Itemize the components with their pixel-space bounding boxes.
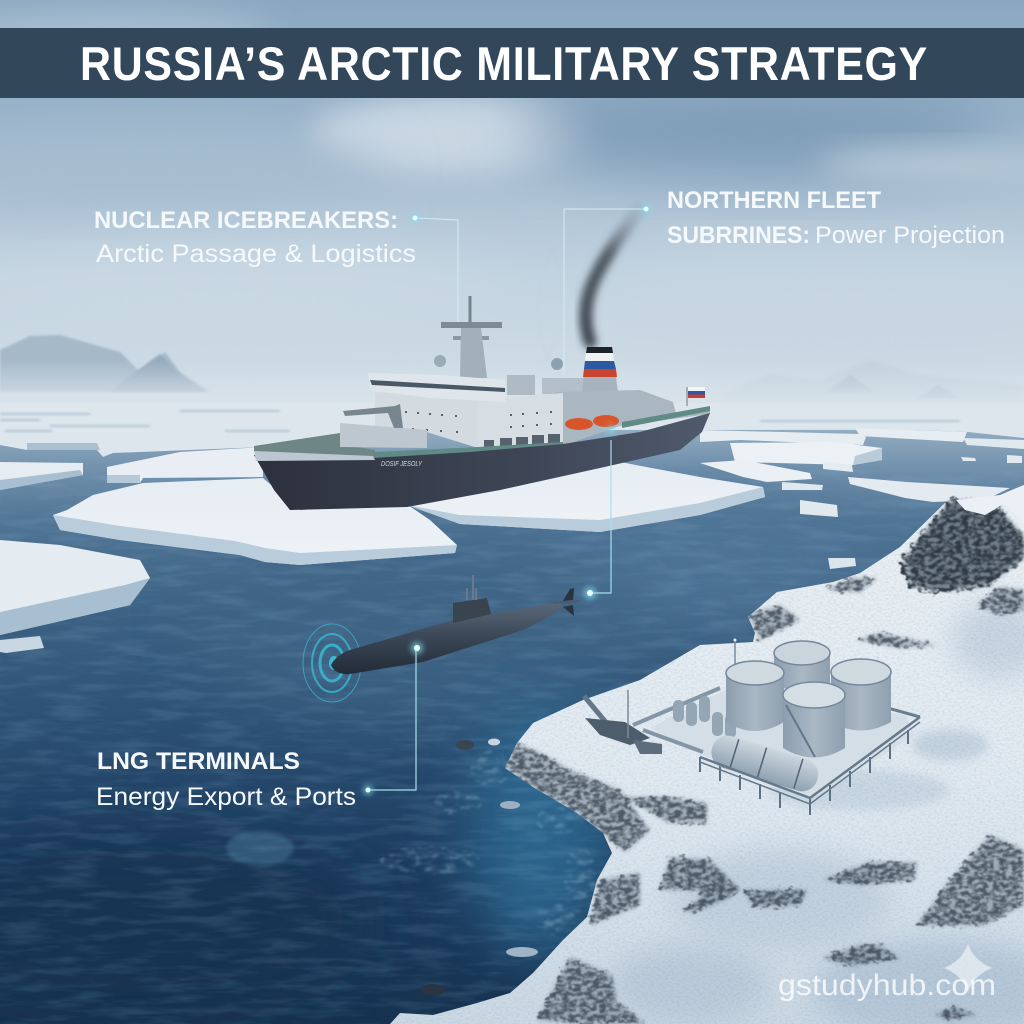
periscopes xyxy=(467,575,476,600)
left distant floes xyxy=(0,447,263,490)
foredeck crane block xyxy=(340,404,427,448)
label: LNG terminals: LNG TERMINALS xyxy=(97,748,300,775)
bow strip xyxy=(254,451,375,461)
right distant floes xyxy=(700,428,1024,569)
main ice floe, left of ship xyxy=(53,478,457,565)
front rack rails xyxy=(700,717,920,804)
coastal foam xyxy=(380,750,596,936)
horizontal tank xyxy=(707,732,822,795)
bridge deck xyxy=(368,373,505,402)
pipe racks xyxy=(633,688,920,815)
callout line: LNG terminals xyxy=(363,642,423,795)
label: nuclear icebreakers xyxy=(94,207,416,268)
horizon ice sheet xyxy=(0,403,1024,457)
label: nuclear icebreakers: Arctic Passage & Logistics xyxy=(96,240,416,268)
small rocks in the water xyxy=(421,738,538,996)
watermark: gstudyhub.com xyxy=(778,969,996,1002)
label: northern fleet submarines: Power Projection xyxy=(815,222,1005,249)
ice floes xyxy=(0,428,1024,653)
storage tank: front xyxy=(783,682,845,758)
label: northern fleet submarines: SUBRRINES: xyxy=(667,222,810,249)
process vessels xyxy=(673,696,736,738)
title banner xyxy=(0,28,1024,98)
callout line: nuclear icebreakers xyxy=(410,213,458,322)
mast and radar xyxy=(434,296,587,395)
storage tank: left xyxy=(726,661,784,731)
label: northern fleet submarines: NORTHERN FLEET xyxy=(667,187,881,214)
green deck rail xyxy=(375,442,563,458)
icebreaker ship xyxy=(254,296,710,510)
snowy coast with mountain xyxy=(390,485,1024,1024)
watermark xyxy=(778,944,996,1002)
mountain rock face xyxy=(900,497,1024,593)
arctic sea xyxy=(0,430,1024,1024)
Russian flag xyxy=(687,387,705,406)
title: RUSSIA’S ARCTIC MILITARY STRATEGY xyxy=(80,37,928,90)
lower left floe xyxy=(0,540,150,635)
lamp post xyxy=(734,638,736,665)
windows xyxy=(405,411,560,449)
callout line: submarine to ship xyxy=(584,425,616,599)
hull xyxy=(331,602,563,674)
aft decks xyxy=(555,390,710,446)
loading arm and building xyxy=(584,690,662,754)
sky background xyxy=(0,0,1024,460)
storage tank: back xyxy=(774,641,830,692)
callout line: northern fleet xyxy=(564,204,651,375)
label: LNG terminals: Energy Export & Ports xyxy=(96,783,356,811)
sail xyxy=(453,598,491,623)
mountain snow cap xyxy=(956,485,1024,525)
lifeboats xyxy=(565,415,619,430)
label: northern fleet submarines xyxy=(667,187,1005,249)
ground shadow xyxy=(650,690,915,800)
ship name: DOSIF JESOLY xyxy=(381,461,423,468)
submarine xyxy=(303,575,580,702)
funnel with Russian colours xyxy=(582,347,618,392)
distant mountains xyxy=(0,335,1024,405)
LNG terminal xyxy=(584,638,920,815)
hull xyxy=(254,413,710,510)
sonar rings xyxy=(303,624,361,702)
tail fins xyxy=(563,588,574,601)
rocky outcrops xyxy=(505,578,1024,1024)
icon: smoke plume xyxy=(586,208,640,342)
label: nuclear icebreakers: NUCLEAR ICEBREAKERS: xyxy=(94,207,398,234)
storage tank: right xyxy=(831,659,891,730)
main ice floe, right of ship xyxy=(407,462,765,532)
foredeck xyxy=(254,433,375,458)
snow shading xyxy=(390,485,1024,1024)
superstructure xyxy=(375,392,478,448)
label: LNG terminals xyxy=(96,748,356,811)
